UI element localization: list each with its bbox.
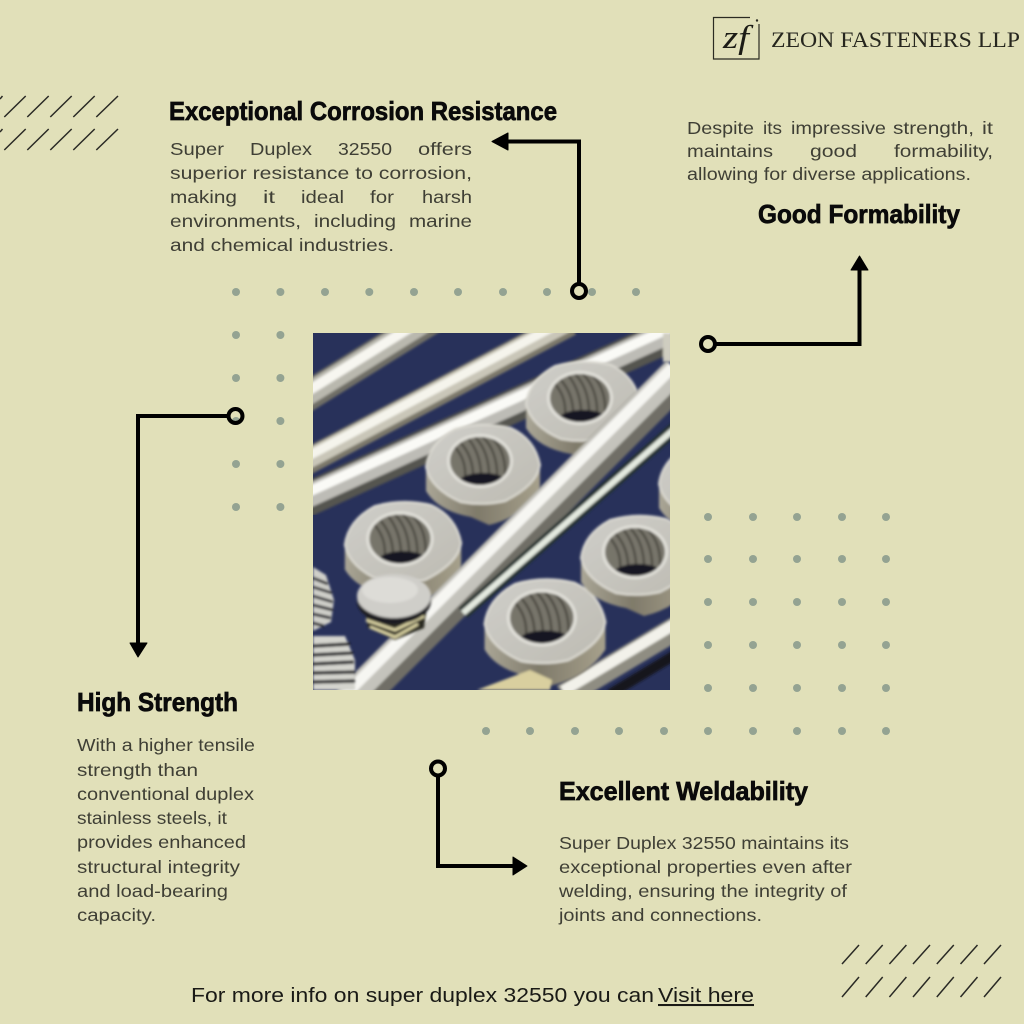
text block: formability description: formability, [894, 141, 993, 161]
text block: strength description: stainless steels, it [77, 808, 227, 828]
arrow: to excellent weldability [431, 762, 527, 875]
panel: excellent weldability [558, 776, 852, 925]
text block: corrosion description: Duplex [250, 139, 312, 159]
footer: more info line: Visit here [658, 984, 754, 1007]
heading: good formability: Good Formability [758, 199, 960, 229]
heading: excellent weldability: Excellent Weldability [559, 776, 809, 806]
text block: formability description: allowing for diverse applications. [687, 164, 971, 184]
text block: strength description: strength than [77, 760, 198, 780]
text block: corrosion description: Super [170, 139, 224, 159]
text block: formability description: maintains [687, 141, 773, 161]
panel: good formability [687, 118, 993, 229]
heading: high strength: High Strength [77, 687, 238, 717]
text block: corrosion description: environments, [170, 211, 301, 231]
panel: exceptional corrosion resistance [169, 96, 557, 255]
text block: corrosion description [170, 139, 472, 255]
arrow: to good formability [701, 256, 868, 351]
text block: corrosion description: it [263, 187, 275, 207]
text block: weldability description [558, 833, 852, 925]
heading: exceptional corrosion resistance: Exceptional Corrosion Resistance [169, 96, 557, 126]
text block: weldability description: Super Duplex 32550 maintains its [559, 833, 849, 853]
logo: Zeon Fasteners LLP [714, 18, 1020, 59]
decorative hatch: top left [0, 96, 118, 150]
text block: formability description: good [810, 141, 857, 161]
text block: formability description: impressive [791, 118, 886, 138]
logo: Zeon Fasteners LLP: ZEON FASTENERS LLP [771, 27, 1020, 52]
text block: strength description [77, 735, 255, 925]
text block: formability description [687, 118, 993, 184]
logo: Zeon Fasteners LLP: zf [722, 20, 754, 56]
text block: corrosion description: ideal [301, 187, 344, 207]
text block: corrosion description: and chemical industries. [170, 235, 394, 255]
text block: corrosion description: offers [418, 139, 472, 159]
text block: weldability description: exceptional properties even after [559, 857, 852, 877]
text block: strength description: structural integrity [77, 857, 240, 877]
text block: corrosion description: harsh [422, 187, 472, 207]
text block: formability description: its [763, 118, 782, 138]
text block: corrosion description: including [314, 211, 396, 231]
text block: corrosion description: for [370, 187, 394, 207]
text block: corrosion description: making [170, 187, 237, 207]
panel: high strength [77, 687, 255, 925]
dot grid: bottom right [482, 513, 890, 735]
footer: more info line: For more info on super duplex 32550 you can [191, 984, 654, 1007]
text block: corrosion description: 32550 [338, 139, 392, 159]
text block: corrosion description: marine [409, 211, 472, 231]
text block: formability description: it [982, 118, 993, 138]
arrow: to high strength [130, 409, 242, 657]
arrow: to corrosion resistance [492, 133, 586, 298]
text block: formability description: strength, [893, 118, 974, 138]
central photo: metal rods and nuts on navy cloth [313, 333, 670, 690]
text block: strength description: With a higher tensile [77, 735, 255, 755]
text block: strength description: provides enhanced [77, 832, 246, 852]
text block: formability description: Despite [687, 118, 754, 138]
text block: strength description: capacity. [77, 905, 156, 925]
text block: weldability description: joints and connections. [558, 905, 762, 925]
text block: corrosion description: superior resistance to corrosion, [170, 163, 472, 183]
decorative hatch: bottom right [842, 945, 1001, 997]
text block: weldability description: welding, ensuring the integrity of [558, 881, 847, 901]
text block: strength description: and load-bearing [77, 881, 228, 901]
text block: strength description: conventional duplex [77, 784, 254, 804]
dot grid: top and left [232, 288, 640, 511]
